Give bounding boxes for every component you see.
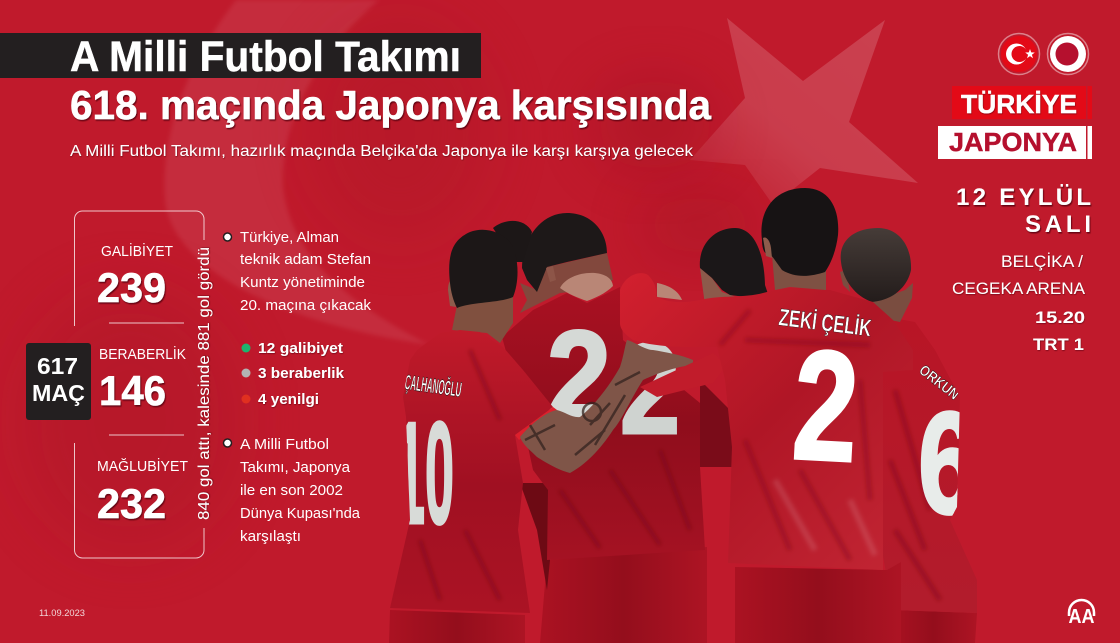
icon: Turkish flag [998,34,1040,74]
stat: beraberlik: 146 [99,367,166,414]
note: Stefan Kuntz: Türkiye, Alman [240,230,339,246]
note: Stefan Kuntz: teknik adam Stefan [240,252,371,268]
note: Stefan Kuntz: 20. maçına çıkacak [240,298,372,314]
player 5 [840,228,978,643]
stat: galibiyet: GALİBİYET [101,242,173,260]
note: last Japan match: karşılaştı [240,529,301,545]
note: last Japan match: A Milli Futbol [240,437,329,453]
date stamp: 11.09.2023 [39,608,85,619]
flag crescent watermark [164,0,430,345]
match venue [952,252,1086,298]
match venue: BELÇİKA / [1001,252,1083,271]
team label: Türkiye: TÜRKİYE [961,89,1077,119]
legend: Kuntz record: 12 galibiyet [258,340,343,357]
stat: beraberlik [99,345,186,414]
players photo [389,188,978,643]
stat: galibiyet [97,242,173,311]
team label: Japonya: JAPONYA [949,127,1077,157]
player 4, Zeki Çelik [620,188,913,643]
stat: mağlubiyet: MAĞLUBİYET [97,457,188,475]
stat: mağlubiyet: 232 [97,480,166,527]
player 4, Zeki Çelik: ZEKİ ÇELİK [777,304,873,342]
stat: beraberlik: BERABERLİK [99,345,186,363]
legend: Kuntz record: 4 yenilgi [258,391,319,408]
player 1: ÇALHANOĞLU [403,370,463,402]
player 5: ORKUN [916,362,962,403]
player 2, number 22 [502,213,707,643]
callout: 617 matches: MAÇ [32,380,85,406]
note: last Japan match: ile en son 2002 [240,483,343,499]
callout: 617 matches [26,343,91,420]
player 5: 6 [918,382,978,544]
match date: SALI [1025,211,1091,238]
note: last Japan match: Takımı, Japonya [240,460,351,476]
legend: Kuntz record [242,340,345,408]
player 1: 10 [396,392,454,554]
flag star watermark [690,18,918,205]
player 2, number 22: 2 [547,305,611,448]
note: Stefan Kuntz: Kuntz yönetiminde [240,275,365,291]
note: last Japan match [224,437,361,545]
match venue: CEGEKA ARENA [952,279,1086,298]
stat: mağlubiyet [97,457,188,527]
note: last Japan match: Dünya Kupası'nda [240,506,361,522]
title bar [0,33,481,78]
icon: AA logo: AA [1068,606,1094,628]
match time and channel [1033,309,1085,354]
subtitle: A Milli Futbol Takımı, hazırlık maçında Belçika'da Japonya ile karşı karşıya gelecek [70,143,694,160]
player 4, Zeki Çelik: 2 [789,318,862,495]
note: Stefan Kuntz [224,230,372,314]
match time and channel: TRT 1 [1033,336,1084,354]
callout: 617 matches: 617 [37,353,78,379]
title line 1: A Milli Futbol Takımı [70,33,461,81]
match date [956,184,1091,238]
tattooed arm and hands [520,273,693,473]
match time and channel: 15.20 [1035,309,1085,327]
player behind, head 3 [700,228,770,467]
icon: Japanese flag [1048,34,1088,74]
match date: 12 EYLÜL [956,184,1091,211]
player 2, number 22: 2 [620,318,680,461]
stat: galibiyet: 239 [97,264,166,311]
player 3 forearm sleeve [640,353,723,397]
panel: head-to-head record frame [74,211,204,558]
legend: Kuntz record: 3 beraberlik [258,365,345,382]
title line 2: 618. maçında Japonya karşısında [70,82,712,128]
player 1 [389,221,557,643]
vertical goals text: 840 gol attı, kalesinde 881 gol gördü [196,247,213,520]
